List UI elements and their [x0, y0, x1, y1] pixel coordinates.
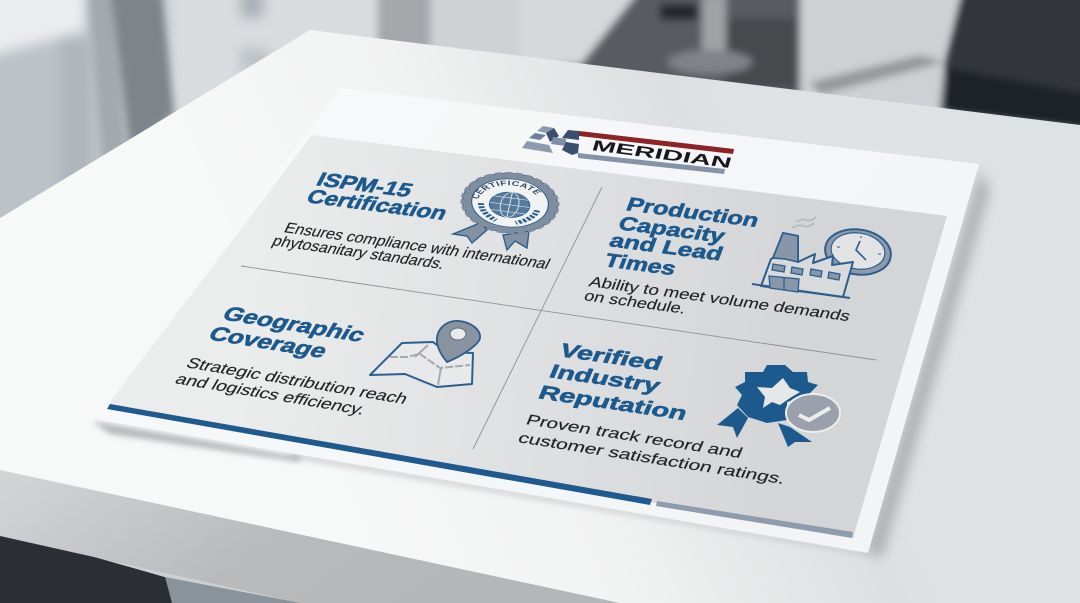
paper shadow — [92, 170, 990, 558]
paper sheet — [94, 88, 979, 553]
table front face — [0, 470, 620, 603]
heading: Geographic — [218, 303, 369, 347]
description: customer satisfaction ratings. — [515, 431, 788, 488]
background: floor and wall — [520, 0, 1080, 130]
heading: Certification — [303, 186, 451, 225]
heading: Reputation — [535, 382, 691, 425]
heading — [204, 303, 369, 363]
quadrant: ISPM-15 certification — [269, 169, 560, 273]
description: and logistics efficiency. — [172, 371, 369, 418]
blue footer bar — [107, 404, 652, 505]
quadrant: geographic coverage — [172, 303, 480, 418]
description: Proven track record and — [523, 413, 745, 462]
heading: Times — [601, 251, 679, 280]
quadrant: production capacity and lead times — [582, 195, 894, 325]
heading — [601, 195, 762, 280]
grey bar — [578, 153, 725, 174]
heading: Industry — [546, 361, 664, 397]
description — [172, 355, 411, 418]
heading: Production — [623, 195, 762, 232]
heading: and Lead — [606, 231, 726, 265]
heading: ISPM-15 — [313, 169, 416, 202]
description: Strategic distribution reach — [183, 355, 411, 408]
description: Ability to meet volume demands — [587, 274, 852, 325]
description: on schedule. — [582, 288, 688, 317]
red bar — [579, 131, 734, 154]
horizontal divider — [241, 266, 876, 360]
icon: map with pin — [370, 321, 480, 387]
icon: award rosette with check — [717, 365, 840, 447]
icon: certificate seal: CERTIFICATE — [472, 180, 542, 198]
description: Ensures compliance with international — [281, 221, 553, 273]
quadrant: verified industry reputation — [515, 340, 840, 488]
logo mark — [522, 126, 579, 155]
clock — [822, 225, 894, 279]
icon: factory with clock — [752, 217, 894, 298]
icon: certificate seal — [450, 172, 560, 252]
wordmark: MERIDIAN — [590, 138, 734, 172]
heading — [303, 169, 451, 225]
heading: Verified — [556, 340, 666, 375]
heading — [535, 340, 691, 425]
factory — [761, 233, 853, 297]
vertical divider — [473, 187, 602, 449]
description: phytosanitary standards. — [269, 234, 448, 273]
description — [515, 413, 788, 488]
description — [582, 274, 852, 325]
heading: Capacity — [615, 214, 728, 248]
heading: Coverage — [204, 323, 331, 363]
content panel — [107, 135, 947, 538]
grey footer bar — [656, 501, 853, 538]
logo: Meridian — [522, 126, 734, 174]
